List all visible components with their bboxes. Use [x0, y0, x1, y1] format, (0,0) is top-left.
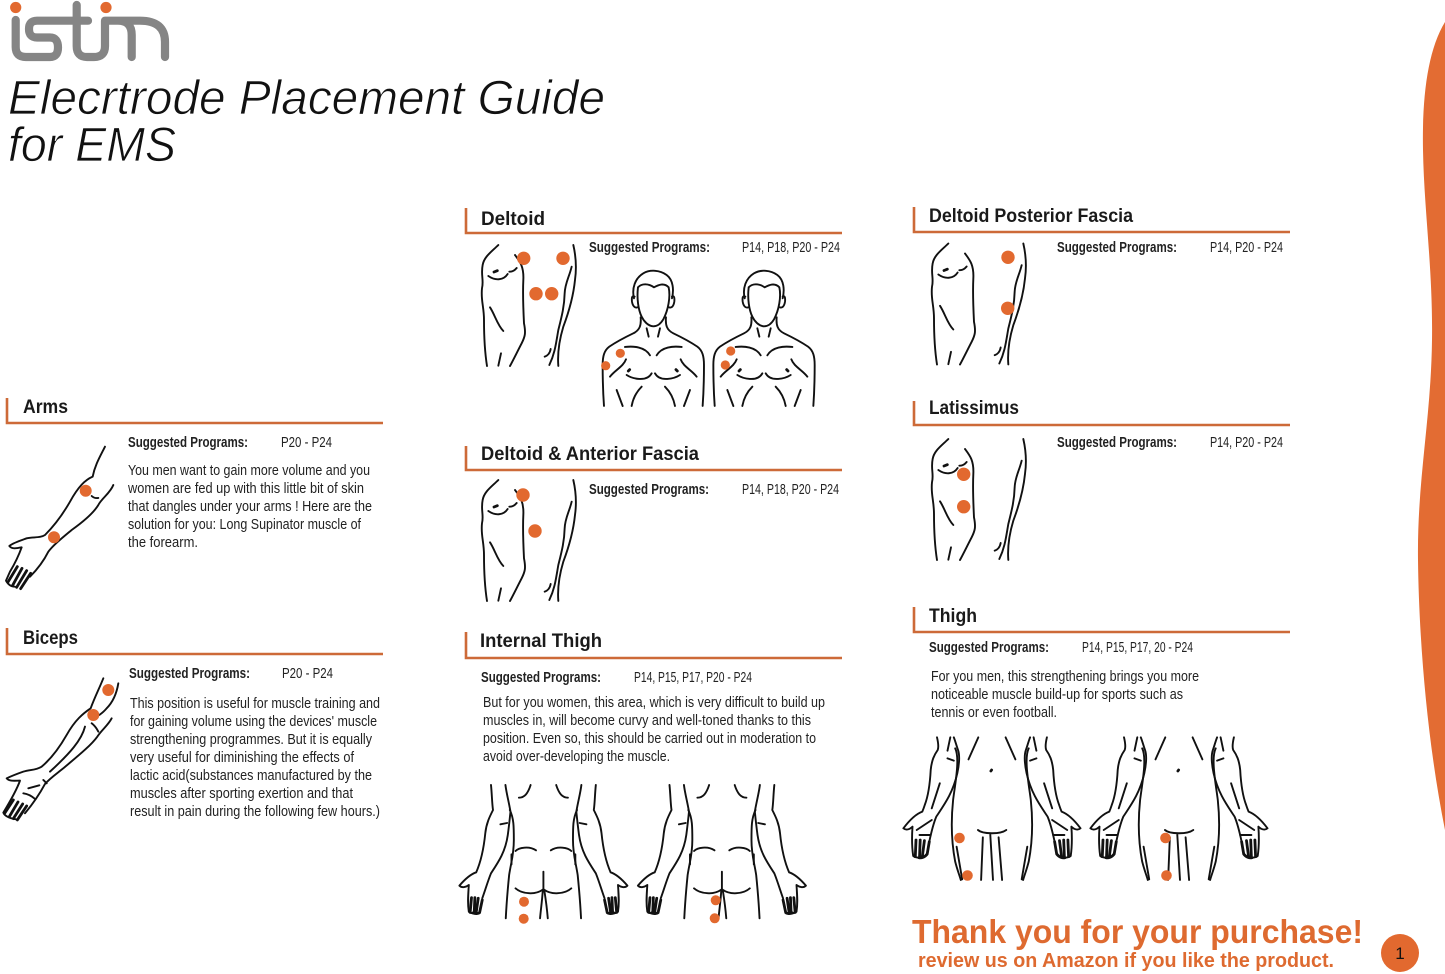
- illustration: torso side view with electrodes: [482, 480, 576, 601]
- heading: thigh: [914, 606, 1290, 632]
- illustration: front view of hips A: [903, 737, 1080, 881]
- suggested programs: deltoid and anterior fascia: P14, P18, P20 - P24: [742, 482, 839, 498]
- thank you message: review us on Amazon if you like the product.: [918, 950, 1334, 972]
- suggested programs: internal thigh: Suggested Programs:: [481, 670, 601, 686]
- text block: biceps description: lactic acid(substances manufactured by the: [130, 768, 372, 784]
- illustration: arm with electrodes: [6, 447, 113, 589]
- title: [8, 72, 605, 172]
- heading: latissimus: [914, 398, 1290, 425]
- suggested programs: thigh: Suggested Programs:: [929, 640, 1049, 656]
- text block: arms description: the forearm.: [128, 535, 198, 551]
- decorative orange wave on right edge: [1418, 22, 1445, 830]
- text block: thigh description: For you men, this strengthening brings you more: [931, 669, 1199, 685]
- heading: deltoid: [466, 208, 842, 233]
- suggested programs: internal thigh: [481, 670, 752, 686]
- text block: internal thigh description: position. Even so, this should be carried out in moderation to: [483, 731, 816, 747]
- thank you message: [912, 913, 1363, 972]
- suggested programs: biceps: P20 - P24: [282, 666, 333, 682]
- suggested programs: biceps: Suggested Programs:: [129, 666, 250, 682]
- text block: biceps description: strengthening programmes. But it is equally: [130, 732, 373, 748]
- suggested programs: latissimus: [1057, 435, 1283, 451]
- text block: thigh description: noticeable muscle build-up for sports such as: [931, 687, 1183, 703]
- suggested programs: internal thigh: P14, P15, P17, P20 - P24: [634, 670, 752, 686]
- title: for EMS: [8, 119, 176, 172]
- illustration: torso side view with electrodes: [932, 439, 1026, 560]
- suggested programs: latissimus: P14, P20 - P24: [1210, 435, 1283, 451]
- suggested programs: deltoid: P14, P18, P20 - P24: [742, 240, 840, 256]
- heading: deltoid posterior fascia: Deltoid Posterior Fascia: [929, 206, 1133, 227]
- suggested programs: deltoid posterior fascia: [1057, 240, 1283, 256]
- text block: arms description: solution for you: Long Supinator muscle of: [128, 517, 362, 533]
- text block: arms description: You men want to gain more volume and you: [128, 463, 370, 479]
- heading: arms: Arms: [23, 397, 68, 418]
- panel: deltoid and anterior fascia: [466, 444, 842, 601]
- illustration: lower back view A: [459, 785, 627, 924]
- text block: biceps description: muscles after sporting exertion and that: [130, 786, 353, 802]
- text block: arms description: [127, 463, 372, 551]
- text block: internal thigh description: muscles in, will become curvy and well-toned thanks to this: [483, 713, 811, 729]
- illustration: male chest front view B: [713, 271, 815, 406]
- text block: internal thigh description: [483, 695, 825, 765]
- suggested programs: arms: P20 - P24: [281, 435, 332, 451]
- heading: arms: [7, 397, 383, 423]
- illustration: lower back view B: [638, 785, 806, 923]
- heading: deltoid and anterior fascia: Deltoid & Anterior Fascia: [481, 444, 699, 465]
- suggested programs: deltoid and anterior fascia: [589, 482, 839, 498]
- suggested programs: deltoid: [589, 240, 840, 256]
- text block: arms description: that dangles under your arms ! Here are the: [128, 499, 372, 515]
- text block: thigh description: [931, 669, 1199, 721]
- suggested programs: thigh: P14, P15, P17, 20 - P24: [1082, 640, 1193, 656]
- illustration: biceps arm with electrodes: [3, 678, 118, 820]
- text block: biceps description: [130, 696, 380, 820]
- text block: arms description: women are fed up with this little bit of skin: [127, 481, 364, 497]
- suggested programs: deltoid posterior fascia: P14, P20 - P24: [1210, 240, 1283, 256]
- heading: deltoid: Deltoid: [481, 209, 545, 230]
- panel: deltoid: [466, 208, 842, 406]
- suggested programs: arms: Suggested Programs:: [128, 435, 248, 451]
- text block: biceps description: for gaining volume using the devices' muscle: [130, 714, 377, 730]
- heading: thigh: Thigh: [929, 606, 977, 627]
- heading: latissimus: Latissimus: [929, 398, 1019, 419]
- heading: deltoid and anterior fascia: [466, 444, 842, 470]
- panel: deltoid posterior fascia: [914, 206, 1290, 364]
- suggested programs: deltoid: Suggested Programs:: [589, 240, 710, 256]
- text block: internal thigh description: But for you women, this area, which is very difficult to build up: [483, 695, 825, 711]
- panel: thigh: [903, 606, 1290, 881]
- suggested programs: thigh: [929, 640, 1193, 656]
- suggested programs: deltoid posterior fascia: Suggested Programs:: [1057, 240, 1177, 256]
- heading: biceps: [7, 628, 383, 654]
- thank you message: Thank you for your purchase!: [912, 913, 1363, 950]
- heading: internal thigh: Internal Thigh: [480, 631, 602, 652]
- text block: internal thigh description: avoid over-developing the muscle.: [483, 749, 670, 765]
- illustration: torso side view with electrodes: [482, 245, 576, 366]
- panel: arms: [6, 397, 383, 589]
- illustration: front view of hips B: [1090, 737, 1268, 881]
- logo: istim: [10, 2, 165, 57]
- illustration: torso side view with electrodes: [932, 243, 1026, 364]
- text block: biceps description: very useful for diminishing the effects of: [130, 750, 355, 766]
- title: Elecrtrode Placement Guide: [8, 72, 605, 125]
- page number badge: [1381, 934, 1419, 972]
- panel: internal thigh: [459, 631, 842, 924]
- heading: internal thigh: [466, 631, 842, 658]
- panel: latissimus: [914, 398, 1290, 560]
- text block: biceps description: result in pain during the following few hours.): [130, 804, 380, 820]
- text block: biceps description: This position is useful for muscle training and: [130, 696, 380, 712]
- suggested programs: latissimus: Suggested Programs:: [1057, 435, 1177, 451]
- suggested programs: deltoid and anterior fascia: Suggested Programs:: [589, 482, 709, 498]
- heading: deltoid posterior fascia: [914, 206, 1290, 232]
- panel: biceps: [3, 628, 383, 820]
- page number badge: 1: [1395, 944, 1405, 963]
- heading: biceps: Biceps: [23, 628, 78, 649]
- text block: thigh description: tennis or even football.: [931, 705, 1057, 721]
- illustration: male chest front view A: [601, 271, 704, 406]
